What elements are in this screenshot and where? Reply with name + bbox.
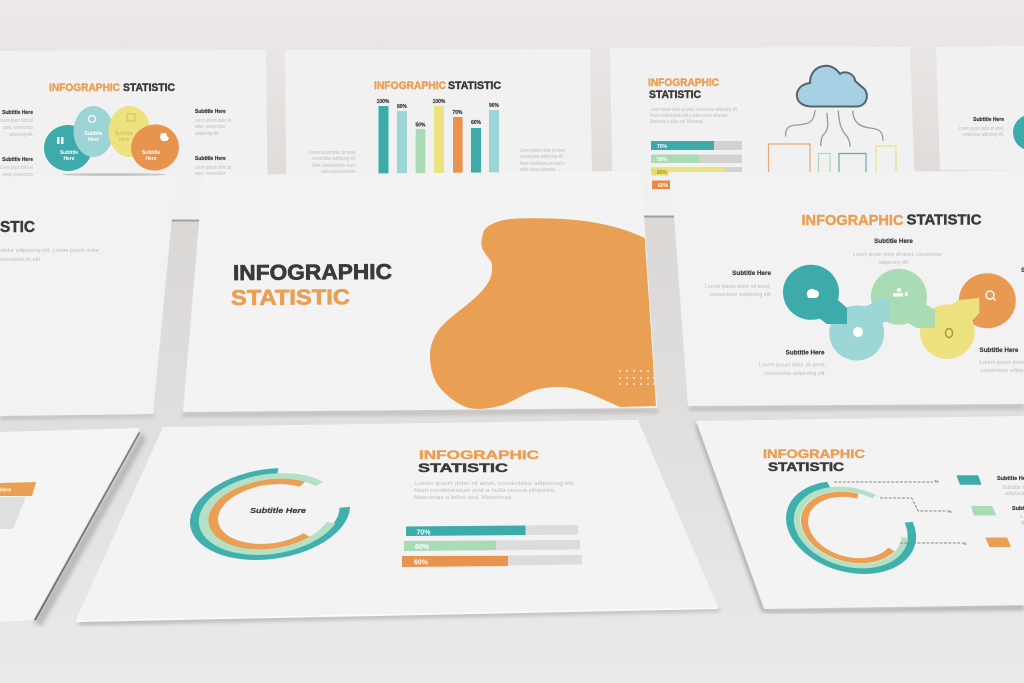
bubble cluster: Subtitle (60, 150, 78, 156)
labels: process slide: Subtitle Here (874, 238, 913, 245)
text block: cloud slide: Nam condimentum erat a nulla cursus pharetra. (650, 113, 728, 119)
icon: bulb (946, 328, 952, 338)
panel: top-left slide with overlapping bubbles (0, 50, 268, 222)
heading: callout slide: INFOGRAPHIC (763, 449, 865, 461)
labels: process slide: Lorem ipsum dolor sit amet, (705, 284, 771, 290)
heading: callout slide (763, 449, 865, 474)
heading: top-center slide (374, 80, 501, 92)
panel: center cover slide (183, 171, 658, 417)
text block: middle-left slide (0, 248, 99, 263)
bar chart: 50% (415, 122, 426, 128)
heading: process slide: INFOGRAPHIC (802, 212, 904, 229)
heading: cloud slide: STATISTIC (649, 89, 701, 101)
dot pattern (619, 370, 655, 385)
heading: process slide: STATISTIC (906, 212, 982, 228)
labels: top-left slide: Lorem ipsum dolor sit (0, 118, 33, 124)
heading: top-left slide (49, 82, 175, 94)
tag: grey body (0, 497, 26, 529)
heading: top-center slide: INFOGRAPHIC (374, 80, 446, 92)
labels: process slide: Subtitle Here (980, 347, 1019, 354)
bubble cluster: Here (145, 156, 157, 162)
leader percent labels: % (934, 479, 939, 484)
progress bars: ring slide: 60% (414, 560, 429, 566)
labels: top-left slide: Lorem ipsum dolor sit (195, 165, 231, 171)
bar chart: 80% (397, 104, 408, 110)
heading: ring slide: INFOGRAPHIC (419, 448, 539, 462)
label: far-right top slide (959, 117, 1004, 138)
text block: cloud slide: Lorem ipsum dolor sit amet, consectetur adipiscing elit. (650, 107, 738, 113)
heading: ring slide: STATISTIC (418, 461, 508, 475)
text block: ring slide: Lorem ipsum dolor sit amet, consectetur adipiscing elit. (415, 481, 575, 487)
callout tags (958, 476, 1010, 546)
bar chart: 100% (377, 99, 390, 105)
labels: top-left slide: Lorem ipsum dolor sit (195, 118, 231, 124)
text block: chart notes: consectetur adipiscing elit. (520, 154, 564, 160)
bubble cluster: Subtitle (142, 150, 160, 156)
bar chart: 90% (489, 103, 500, 109)
labels: top-left slide: Subtitle Here (2, 110, 33, 116)
heading: cover title: INFOGRAPHIC (233, 260, 392, 285)
heading: cloud slide: INFOGRAPHIC (648, 77, 719, 89)
bar chart: 60% (471, 120, 482, 126)
text block: ring slide (414, 481, 575, 501)
leader percent labels: % (962, 541, 967, 546)
bar chart: 100% (433, 99, 446, 105)
progress bars: cloud slide (651, 141, 742, 189)
labels: top-left slide: Subtitle Here (195, 109, 226, 115)
panel: top-right slide with cloud diagram (610, 47, 916, 218)
labels: top-left slide: Subtitle Here (195, 156, 226, 162)
panel: bottom-right slide with ring and callouts (695, 416, 1024, 613)
heading: top-left slide: INFOGRAPHIC (49, 82, 120, 94)
bubble cluster: Here (118, 137, 130, 143)
labels: top-left slide: amet, consectetur (3, 172, 33, 178)
panel: far-right top slide (936, 46, 1024, 170)
labels: process slide: consectetur adipiscing elit. (764, 371, 826, 377)
text block: chart notes: nulla cursus pharetra. (520, 167, 556, 173)
heading: ring slide (418, 448, 539, 475)
progress bars: cloud slide: 80% (657, 170, 668, 176)
blob: orange shape (430, 218, 656, 409)
labels: process slide: Lorem ipsum dolor sit amet, consectetur (853, 252, 942, 258)
labels: process slide: Subtitle Here (786, 350, 825, 356)
leader percent labels (934, 479, 967, 546)
label: far-right top slide: Lorem ipsum dolor sit amet, (959, 126, 1004, 132)
connectors: cloud to boxes (786, 110, 883, 147)
panel: top-center slide with bar chart (285, 49, 592, 176)
heading: cover title (231, 260, 392, 310)
ring label: Subtitle Here (250, 508, 306, 515)
progress bars: ring slide: 70% (416, 530, 431, 536)
icon: people (893, 288, 908, 296)
labels: top-left slide: amet, consectetur (195, 171, 225, 177)
labels: process slide (705, 238, 1024, 377)
bar chart: 70% (452, 110, 463, 116)
labels: process slide: consectetur adipiscing elit. (710, 292, 772, 298)
heading: top-left slide: STATISTIC (123, 82, 175, 94)
text block: chart notes: nulla cursus pharetra. (321, 169, 356, 175)
heading: middle-left slide: STIC (0, 219, 35, 236)
labels: top-left slide: adipiscing elit. (9, 132, 33, 138)
label: far-right top slide: Subtitle Here (973, 117, 1004, 123)
labels: process slide: Lorem ipsum dolor sit amet, (759, 362, 826, 368)
panel: middle-left slide (0, 176, 176, 420)
dashed leader lines (834, 482, 962, 543)
text block: cloud slide: Maecenas a tellus sed. Maecenas. (650, 119, 704, 125)
progress bars: ring slide: 60% (415, 544, 430, 551)
outlined boxes (768, 144, 896, 172)
text block: ring slide: Maecenas a tellus sed. Maecenas. (414, 495, 513, 501)
text block: chart notes: consectetur adipiscing elit. (312, 156, 356, 162)
progress bars: cloud slide: 50% (657, 157, 668, 163)
panel: bottom-center slide with ring and bars (76, 420, 720, 625)
text block: cloud slide (650, 107, 738, 125)
bubble cluster (44, 106, 184, 176)
labels: top-left slide: adipiscing elit. (195, 131, 219, 137)
icon: cloud (797, 66, 867, 106)
text block: ring slide: Nam condimentum erat a nulla cursus pharetra. (414, 488, 556, 494)
tag text: Here (0, 488, 11, 494)
progress bars: cloud slide: 70% (657, 144, 668, 150)
heading: callout slide: STATISTIC (768, 462, 844, 474)
icon: pie (853, 327, 863, 337)
bubble cluster: Here (88, 137, 99, 143)
progress bars: cloud slide: 60% (658, 183, 669, 189)
ring chart (177, 468, 363, 560)
bar chart (377, 99, 500, 176)
heading: top-center slide: STATISTIC (448, 80, 501, 92)
labels: process slide: adipiscing elit. (879, 260, 909, 266)
leader percent labels: % (948, 509, 952, 514)
tag: orange header (0, 482, 36, 496)
icon: cloud user (807, 289, 819, 298)
panel: bottom-left slide (0, 428, 146, 626)
panel: middle-right slide with process circles (671, 170, 1024, 411)
text block: chart notes (309, 148, 566, 175)
icon: magnifier (986, 291, 996, 300)
bubble cluster: Here (63, 156, 75, 162)
labels: top-left slide (0, 109, 231, 178)
bubble cluster: Subtitle (84, 131, 103, 137)
text block: middle-left slide: ctetur adipiscing elit. Lorem ipsum dolor (0, 248, 99, 254)
ring chart: callout slide (775, 482, 928, 574)
process circles (783, 265, 1016, 360)
text block: chart notes: Nam condimentum erat a (312, 163, 356, 169)
text block: chart notes: Lorem ipsum dolor sit amet, (309, 150, 356, 156)
heading: process slide (802, 212, 982, 229)
text block: chart notes: Nam condimentum erat a (520, 161, 564, 167)
heading: cover title: STATISTIC (231, 285, 350, 310)
bubble cluster: Subtitle (115, 131, 133, 137)
heading: cloud slide (648, 77, 719, 101)
text block: middle-left slide: nsectetur to elit (0, 257, 41, 263)
labels: top-left slide: Subtitle Here (2, 157, 33, 163)
labels: top-left slide: Lorem ipsum dolor sit (0, 165, 33, 171)
partial circle (1013, 114, 1024, 150)
labels: process slide: Subtitle Here (732, 270, 771, 277)
labels: top-left slide: amet, consectetur (195, 124, 225, 130)
label: far-right top slide: consectetur adipiscing elit. (962, 132, 1004, 138)
progress bars: ring slide (402, 525, 582, 567)
callout labels (997, 476, 1024, 526)
labels: top-left slide: amet, consectetur (3, 125, 33, 131)
text block: chart notes: Lorem ipsum dolor sit amet, (520, 148, 566, 154)
